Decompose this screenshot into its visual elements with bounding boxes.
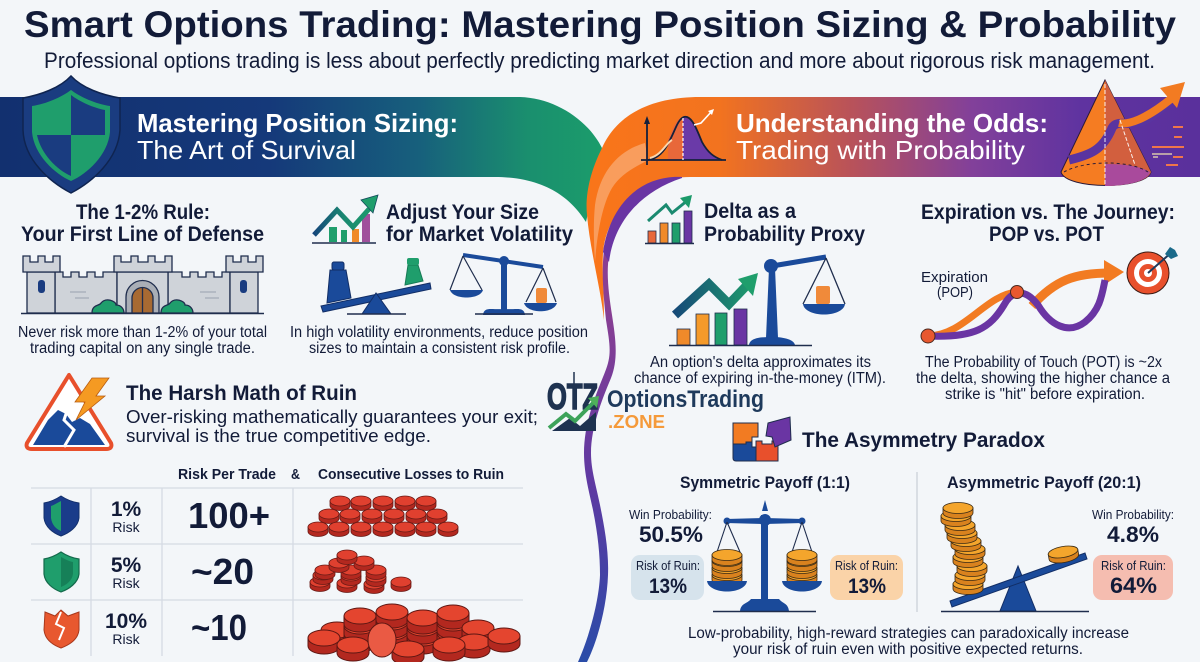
- row: 1% risk: [44, 495, 458, 536]
- body text: sizes to maintain a consistent risk profile.: [309, 340, 570, 357]
- closing text: your risk of ruin even with positive expected returns.: [733, 641, 1083, 658]
- decorative probability dashes: [1152, 127, 1184, 165]
- icon: castle: [21, 256, 264, 314]
- logo wordmark: OptionsTrading: [607, 386, 764, 413]
- chips: [308, 496, 458, 536]
- body text: [290, 324, 588, 357]
- logo wordmark: [607, 386, 764, 432]
- description: Over-risking mathematically guarantees your exit;: [126, 406, 538, 427]
- body text: Never risk more than 1-2% of your total: [18, 324, 267, 341]
- heading: [921, 201, 1175, 246]
- table header: &: [291, 467, 300, 483]
- heading: Expiration vs. The Journey:: [921, 201, 1175, 224]
- banner heading left: The Art of Survival: [137, 135, 356, 165]
- chips: [308, 604, 520, 662]
- risk box red: [1093, 555, 1173, 600]
- body text: [18, 324, 267, 357]
- body text: chance of expiring in-the-money (ITM).: [634, 370, 886, 387]
- body text: strike is "hit" before expiration.: [945, 386, 1145, 403]
- icon: puzzle: [733, 417, 791, 461]
- banner heading right: Understanding the Odds:: [736, 108, 1048, 138]
- description: [126, 406, 538, 446]
- win probability: 4.8%: [1107, 522, 1159, 547]
- row: 10% risk: [44, 604, 520, 662]
- icon: tilted seesaw with coins: [941, 502, 1089, 612]
- purple ribbon: [578, 177, 680, 662]
- subheading: Asymmetric Payoff (20:1): [947, 473, 1141, 492]
- heading: [386, 201, 573, 246]
- risk box blue: 13%: [649, 575, 687, 598]
- risk label: 1%: [111, 498, 141, 521]
- label: expiration pop: [921, 269, 988, 301]
- risk label: 10%: [105, 610, 147, 633]
- risk box orange: Risk of Ruin:: [835, 558, 898, 573]
- win probability: [1092, 507, 1174, 547]
- banner heading left: [137, 108, 458, 165]
- risk box blue: [631, 555, 704, 600]
- body text: [916, 354, 1170, 403]
- heading: Delta as a: [704, 200, 796, 223]
- win probability: 50.5%: [639, 522, 703, 547]
- panel: delta as a probability proxy: [634, 195, 886, 387]
- risk box blue: Risk of Ruin:: [636, 558, 700, 573]
- icon: green shield: [44, 552, 79, 592]
- subheading: Symmetric Payoff (1:1): [680, 473, 850, 492]
- symmetric payoff: [629, 473, 903, 612]
- heading: Adjust Your Size: [386, 201, 539, 224]
- risk label: [105, 610, 147, 647]
- row: 5% risk: [44, 550, 411, 594]
- icon: trend chart: [312, 195, 378, 243]
- body text: [634, 354, 886, 387]
- label: expiration pop: Expiration: [921, 269, 988, 286]
- body text: the delta, showing the higher chance a: [916, 370, 1170, 387]
- description: survival is the true competitive edge.: [126, 425, 431, 446]
- icon: blue shield: [44, 496, 79, 536]
- risk label: Risk: [112, 519, 141, 535]
- heading: for Market Volatility: [386, 223, 573, 246]
- icon: broken red shield: [44, 610, 79, 648]
- banner heading left: Mastering Position Sizing:: [137, 108, 458, 138]
- value: ~20: [191, 551, 254, 592]
- chips: [310, 550, 411, 594]
- risk box orange: [830, 555, 903, 600]
- body text: An option's delta approximates its: [650, 354, 871, 371]
- heading: [704, 200, 865, 246]
- value: ~10: [191, 607, 247, 648]
- table header: [178, 467, 504, 483]
- banner heading right: [736, 108, 1048, 165]
- risk box red: Risk of Ruin:: [1101, 558, 1166, 573]
- icon: warning triangle: [27, 375, 111, 449]
- body text: The Probability of Touch (POT) is ~2x: [925, 354, 1162, 371]
- logo mark: [547, 372, 599, 431]
- heading: The Asymmetry Paradox: [802, 429, 1045, 452]
- body text: In high volatility environments, reduce position: [290, 324, 588, 341]
- asymmetric payoff: [941, 473, 1174, 612]
- heading: The Harsh Math of Ruin: [126, 382, 357, 405]
- table header: Consecutive Losses to Ruin: [318, 467, 504, 483]
- heading: The 1-2% Rule:: [76, 201, 210, 224]
- title: Smart Options Trading: Mastering Position Sizing & Probability: [24, 4, 1176, 45]
- ribbon highlight: [594, 143, 648, 262]
- subtitle: Professional options trading is less about perfectly predicting market direction and more about rigorous risk management.: [44, 48, 1155, 73]
- icon: delta chart: [645, 195, 694, 244]
- banner heading right: Trading with Probability: [736, 135, 1025, 165]
- illustration: chart and scale: [669, 257, 845, 346]
- risk label: 5%: [111, 554, 141, 577]
- icon: probability cone: [1061, 80, 1185, 186]
- heading: Your First Line of Defense: [21, 223, 264, 246]
- heading: [21, 201, 264, 246]
- banner: odds with orange ribbon: [587, 97, 1200, 320]
- win probability: [629, 507, 712, 547]
- win probability: Win Probability:: [629, 507, 712, 522]
- risk label: Risk: [112, 575, 141, 591]
- logo mark: OTZ: [547, 376, 598, 417]
- panel: the 1-2% rule: [18, 201, 267, 357]
- logo wordmark: .ZONE: [608, 412, 665, 432]
- banner: position sizing: [0, 97, 602, 222]
- win probability: Win Probability:: [1092, 507, 1174, 522]
- icon: header shield: [23, 76, 120, 193]
- icon: balanced scale: [707, 500, 822, 612]
- panel: the harsh math of ruin: [27, 375, 538, 662]
- panel: expiration vs the journey: [916, 201, 1178, 403]
- icon: seesaw with weights: [321, 258, 431, 314]
- risk box orange: 13%: [848, 575, 886, 598]
- risk box red: 64%: [1110, 573, 1157, 598]
- panel: the asymmetry paradox: [629, 417, 1174, 658]
- chart: pop and pot paths: [921, 260, 1124, 343]
- risk label: [111, 554, 141, 591]
- heading: Probability Proxy: [704, 223, 865, 246]
- label: expiration pop: (POP): [937, 284, 973, 301]
- value: 100+: [188, 495, 270, 536]
- logo: [547, 372, 764, 432]
- closing text: Low-probability, high-reward strategies can paradoxically increase: [688, 625, 1129, 642]
- risk label: [111, 498, 141, 535]
- icon: target: [1127, 247, 1178, 294]
- ribbon purple top: [603, 177, 682, 262]
- table header: Risk Per Trade: [178, 467, 276, 483]
- icon: bell curve: [641, 109, 726, 165]
- body text: trading capital on any single trade.: [30, 340, 255, 357]
- risk label: Risk: [112, 631, 141, 647]
- heading: POP vs. POT: [989, 223, 1104, 246]
- panel: adjust your size: [290, 195, 588, 357]
- closing text: [688, 625, 1129, 658]
- icon: balance scale: [450, 255, 557, 315]
